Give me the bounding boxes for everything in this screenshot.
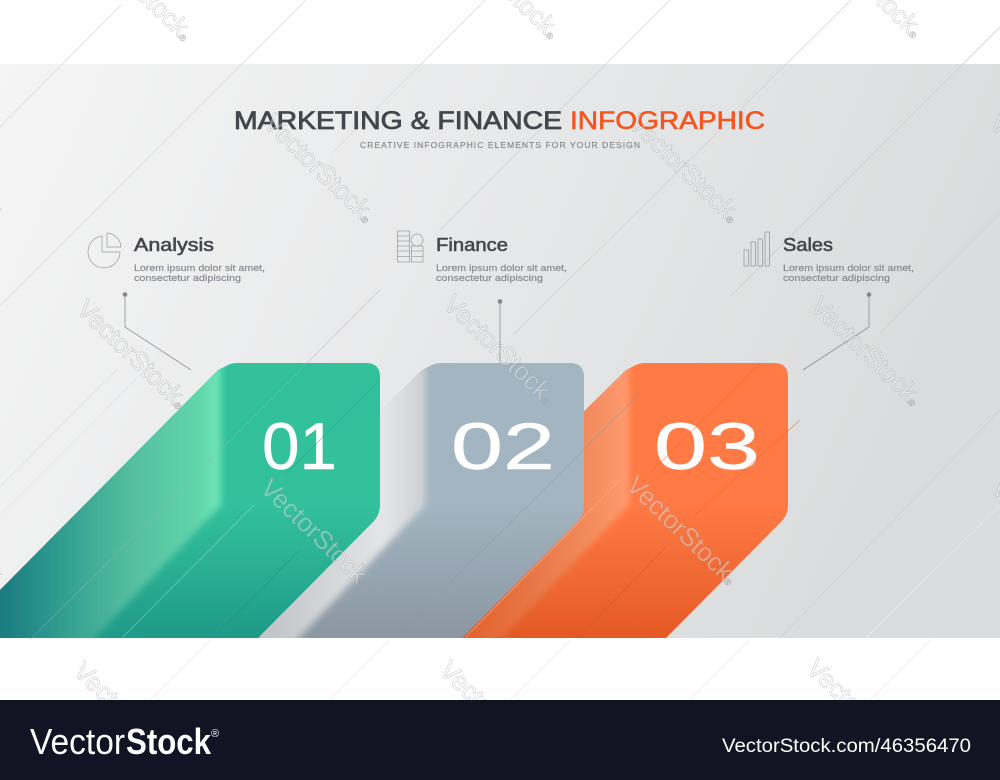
band 1: green [0, 355, 400, 645]
icon: pie chart [88, 233, 121, 268]
item: Analysis [88, 233, 265, 370]
watermarks: VectorStock® [68, 656, 192, 777]
band 2: grey [258, 363, 584, 638]
description: Sales [783, 263, 914, 283]
footer logo: ® [211, 728, 219, 740]
title [234, 107, 765, 135]
grey background panel [0, 64, 1000, 638]
watermarks: VectorStock® [258, 108, 382, 229]
description: Finance: Lorem ipsum dolor sit amet, [436, 263, 567, 273]
connector: Sales [803, 292, 871, 370]
item: Finance [398, 231, 567, 363]
subtitle: CREATIVE INFOGRAPHIC ELEMENTS FOR YOUR DESIGN [360, 140, 640, 150]
watermarks: VectorStock® [805, 291, 929, 412]
watermarks: VectorStock® [438, 289, 562, 410]
number 02: 02 [451, 409, 555, 483]
description: Analysis [134, 263, 265, 283]
item: Sales [744, 232, 914, 370]
icon: coin stacks [398, 231, 423, 262]
description: Finance [436, 263, 567, 283]
footer bar [0, 700, 1000, 780]
watermarks: VectorStock® [255, 473, 379, 594]
watermarks: VectorStock® [71, 294, 195, 415]
description: Analysis: consectetur adipiscing [134, 273, 241, 283]
description: Sales: Lorem ipsum dolor sit amet, [783, 263, 914, 273]
heading: Finance: Finance [436, 235, 508, 255]
watermarks: VectorStock® [623, 108, 747, 229]
heading: Analysis: Analysis [134, 235, 214, 255]
watermarks: VectorStock® [621, 470, 745, 591]
connector: Finance [498, 299, 502, 363]
connector: Analysis [123, 292, 191, 370]
band 3: orange [462, 363, 788, 638]
description: Sales: consectetur adipiscing [783, 273, 890, 283]
footer url: VectorStock.com/46356470 [722, 736, 971, 757]
icon: bar chart [744, 232, 770, 266]
number 03: 03 [654, 409, 760, 483]
watermarks: VectorStock® [801, 653, 925, 774]
number 01: 01 [262, 409, 337, 483]
footer logo [30, 721, 219, 762]
description: Finance: consectetur adipiscing [436, 273, 543, 283]
title: INFOGRAPHIC [570, 107, 765, 135]
title: MARKETING & FINANCE [234, 107, 562, 135]
footer logo: Vector [30, 721, 125, 762]
heading: Sales: Sales [783, 235, 833, 255]
description: Analysis: Lorem ipsum dolor sit amet, [134, 263, 265, 273]
watermarks: VectorStock® [434, 655, 558, 776]
footer logo: Stock [126, 721, 212, 762]
